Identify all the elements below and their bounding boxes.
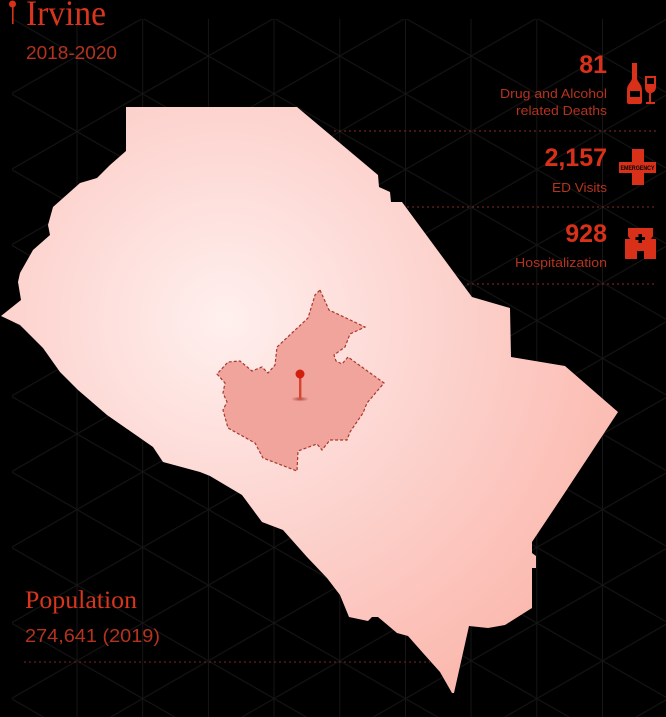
- icon: map pin: [291, 370, 309, 402]
- icon: emergency cross: [619, 149, 656, 185]
- stat: hospitalization: Hospitalization: [515, 255, 607, 270]
- stat: drug and alcohol deaths: related Deaths: [516, 103, 608, 118]
- stat: drug and alcohol deaths: [500, 51, 608, 118]
- icon: emergency cross: EMERGENCY: [620, 165, 655, 172]
- stat: ED visits: [544, 144, 608, 195]
- dotted rule: population: [24, 661, 430, 663]
- map: county silhouette: [1, 107, 618, 693]
- icon: title pin: [9, 0, 16, 24]
- population value: 274,641 (2019): [25, 625, 160, 646]
- dotted rule: hospitalization: [467, 283, 656, 285]
- stat: drug and alcohol deaths: Drug and Alcohol: [500, 86, 607, 101]
- icon: hospital: [625, 228, 656, 259]
- stat: drug and alcohol deaths: 81: [579, 51, 607, 79]
- population heading: Population: [25, 587, 138, 614]
- icon: bottle and glass: [627, 63, 656, 104]
- stat: hospitalization: 928: [565, 220, 607, 248]
- date range: 2018-2020: [26, 43, 117, 63]
- stat: ED visits: ED Visits: [552, 180, 608, 195]
- dotted rule: drug deaths: [334, 130, 656, 132]
- dotted rule: ED visits: [402, 206, 656, 208]
- stat: hospitalization: [515, 220, 607, 270]
- map: Irvine boundary: [217, 290, 384, 471]
- stat: ED visits: 2,157: [544, 144, 607, 172]
